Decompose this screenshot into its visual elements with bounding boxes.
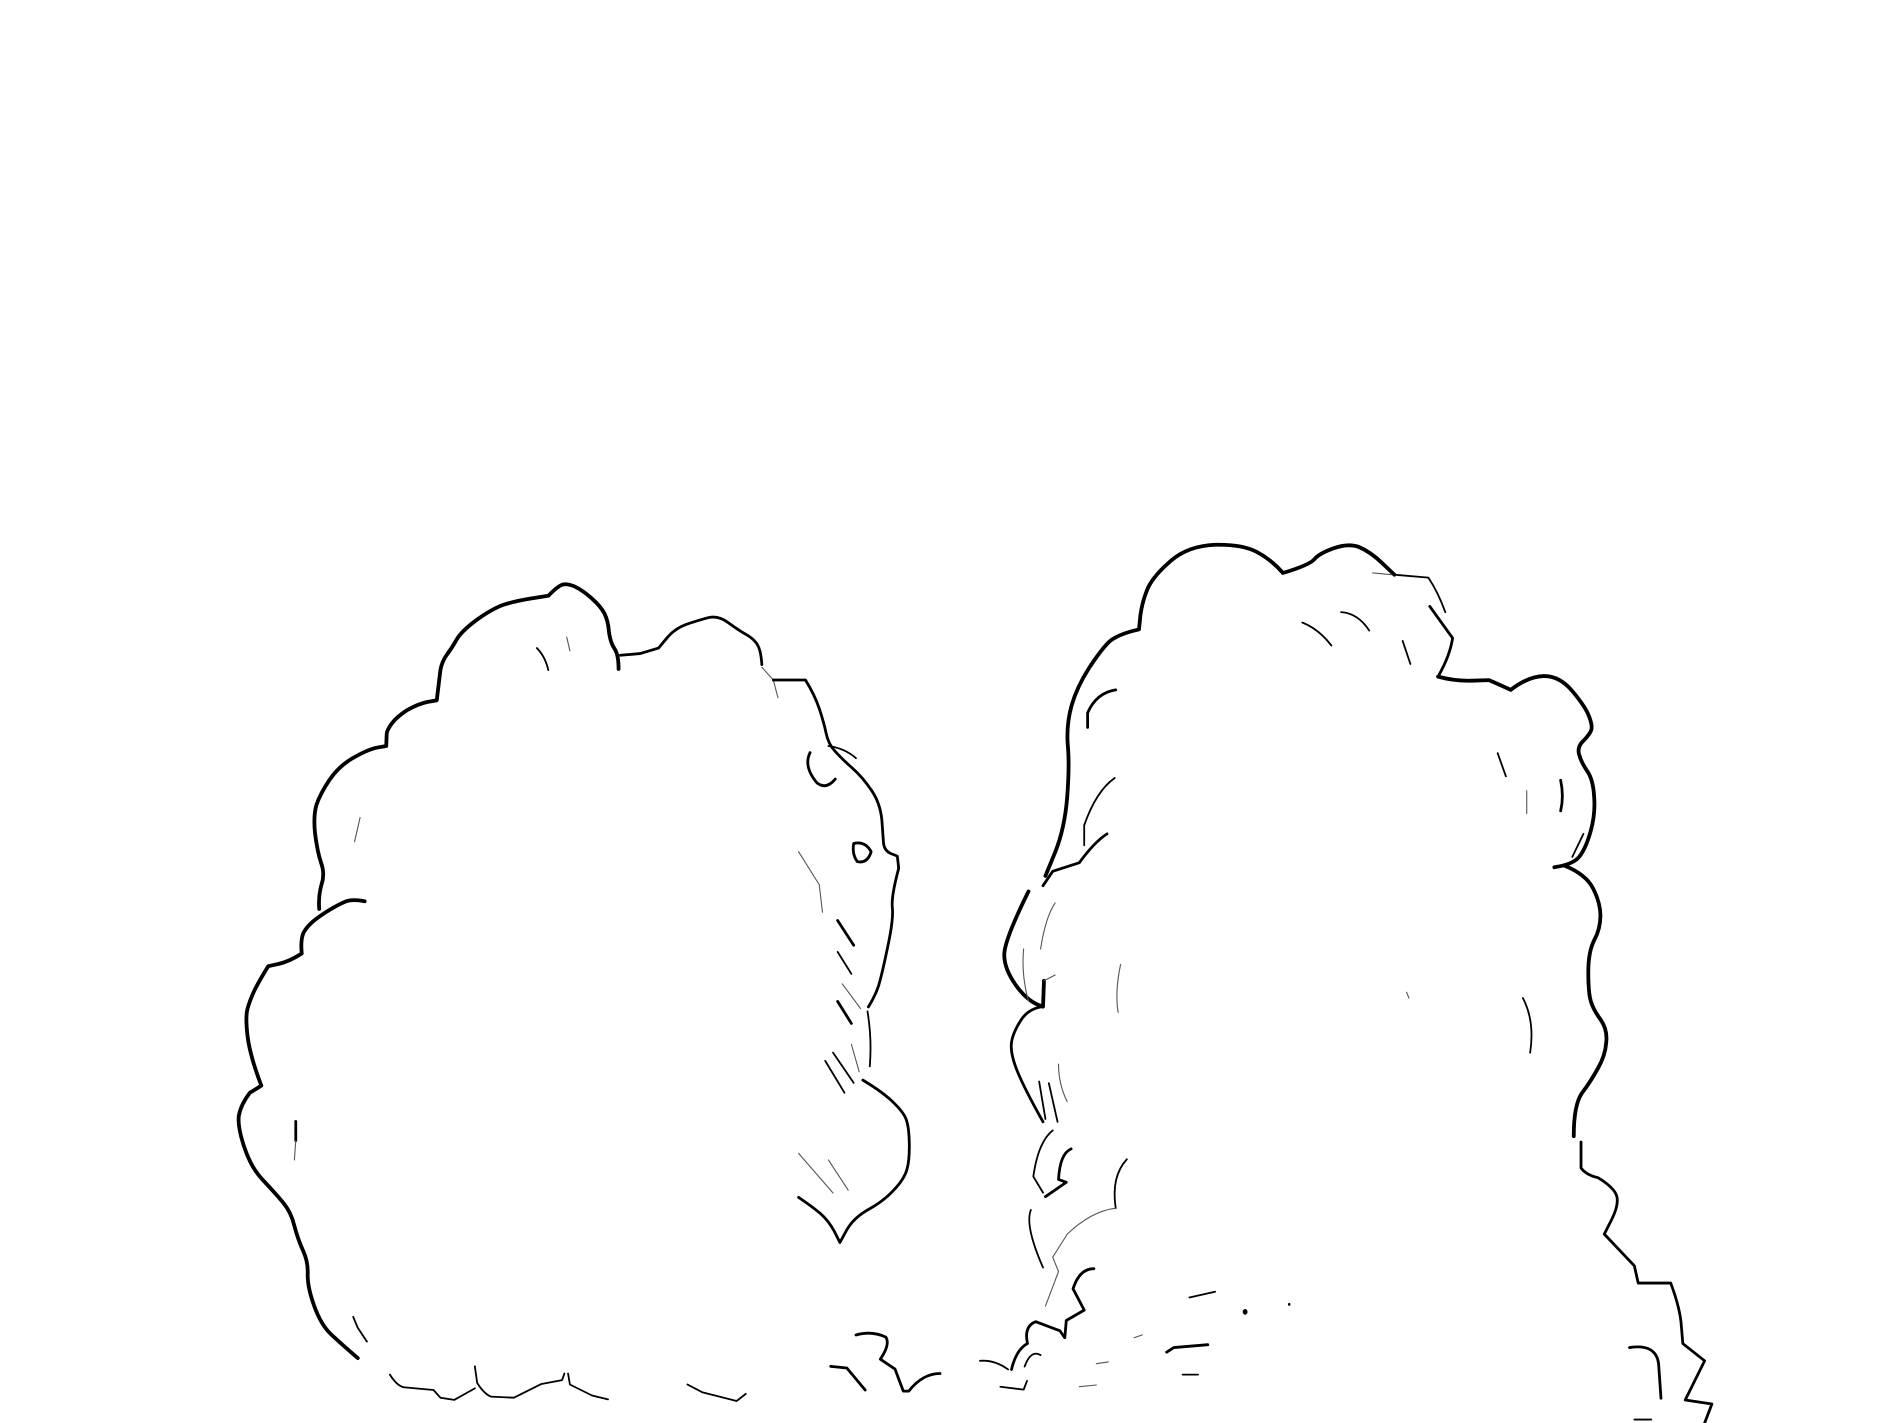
left cloud: hatch marks [294, 637, 861, 1193]
right cloud: inner left folds [980, 690, 1127, 1390]
left cloud: curl and small oval [808, 746, 871, 862]
left cloud: bottom edge strokes [353, 1317, 746, 1401]
right cloud [980, 545, 1712, 1423]
left cloud: lower right squiggle [831, 1333, 940, 1391]
left cloud [239, 584, 940, 1401]
left cloud: main outline [239, 584, 909, 1358]
right cloud: main outline [1004, 545, 1712, 1423]
right cloud: hatch marks and details [1039, 573, 1661, 1420]
